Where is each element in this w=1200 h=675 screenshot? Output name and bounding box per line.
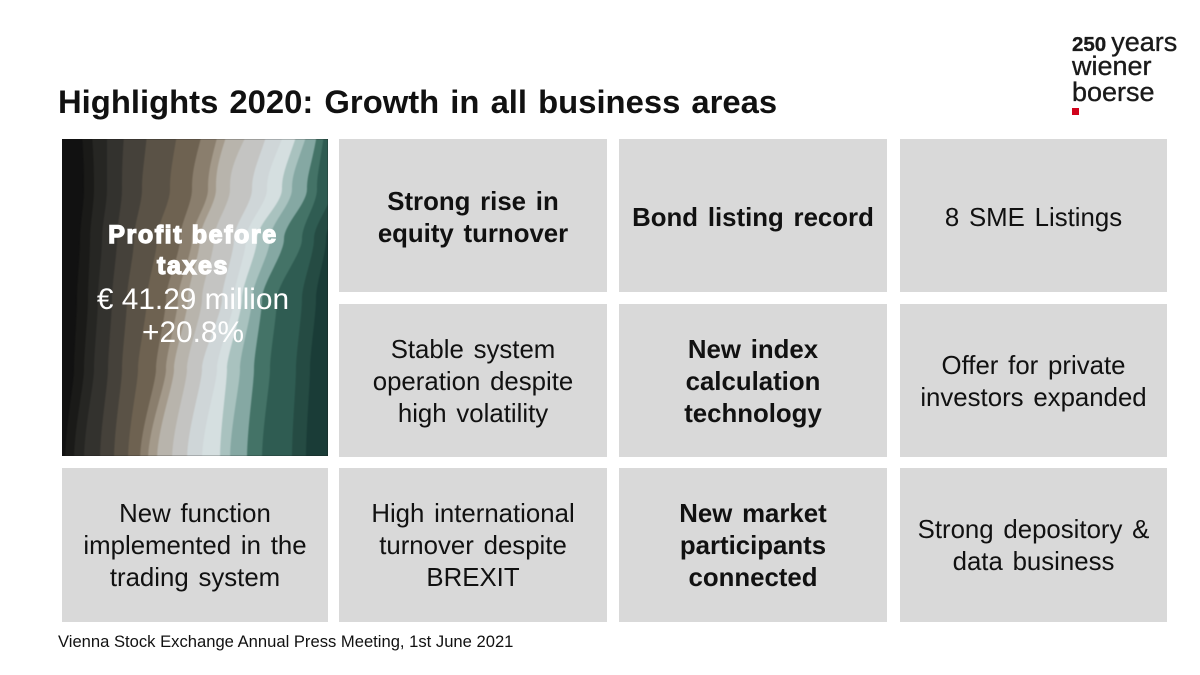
card: stable system — [339, 304, 607, 457]
card: SME listings: 8 SME Listings — [945, 204, 1122, 232]
card: private investors: Offer for private — [942, 352, 1125, 380]
card: market participants: connected — [688, 564, 818, 592]
card: index technology: New index — [688, 336, 818, 364]
footer note: Vienna Stock Exchange Annual Press Meeting, 1st June 2021 — [58, 632, 513, 651]
card: new function: implemented in the — [83, 532, 307, 560]
card: equity turnover: equity turnover — [378, 220, 568, 248]
card: market participants: participants — [680, 532, 826, 560]
text: profit figures: +20.8% — [142, 316, 244, 349]
card: international turnover: BREXIT — [426, 564, 520, 592]
card: stable system: Stable system — [391, 336, 555, 364]
text: profit figures: € 41.29 million — [97, 283, 289, 316]
card: new function: trading system — [110, 564, 280, 592]
card: SME listings — [900, 139, 1167, 292]
logo: 250 years wiener boerse: wiener — [1072, 51, 1152, 81]
logo: 250 years wiener boerse — [1072, 27, 1177, 115]
panel: profit before taxes — [62, 139, 328, 456]
card: stable system: high volatility — [398, 400, 548, 428]
card: equity turnover — [339, 139, 607, 292]
card: new function — [62, 468, 328, 622]
card: depository and data: Strong depository & — [918, 516, 1149, 544]
title: Highlights 2020: Growth in all business areas — [58, 83, 777, 120]
card: international turnover: turnover despite — [379, 532, 567, 560]
card: new function: New function — [119, 500, 271, 528]
card: private investors: investors expanded — [920, 384, 1147, 412]
card: private investors — [900, 304, 1167, 457]
card: market participants — [619, 468, 887, 622]
card: depository and data: data business — [953, 548, 1114, 576]
card: index technology — [619, 304, 887, 457]
card: market participants: New market — [679, 500, 827, 528]
logo: 250 years wiener boerse: 250years — [1072, 27, 1177, 57]
logo: 250 years wiener boerse: boerse — [1072, 77, 1155, 107]
card: stable system: operation despite — [373, 368, 573, 396]
card: index technology: technology — [684, 400, 822, 428]
image: flowing colour bands — [66, 139, 328, 456]
card: bond listing — [619, 139, 887, 292]
card: international turnover: High international — [371, 500, 575, 528]
text: profit figures: Profit before — [108, 221, 278, 249]
card: depository and data — [900, 468, 1167, 622]
text: profit figures — [97, 221, 289, 349]
card: bond listing: Bond listing record — [632, 204, 874, 232]
card: equity turnover: Strong rise in — [387, 188, 559, 216]
text: profit figures: taxes — [157, 252, 229, 280]
card: international turnover — [339, 468, 607, 622]
card: index technology: calculation — [686, 368, 820, 396]
